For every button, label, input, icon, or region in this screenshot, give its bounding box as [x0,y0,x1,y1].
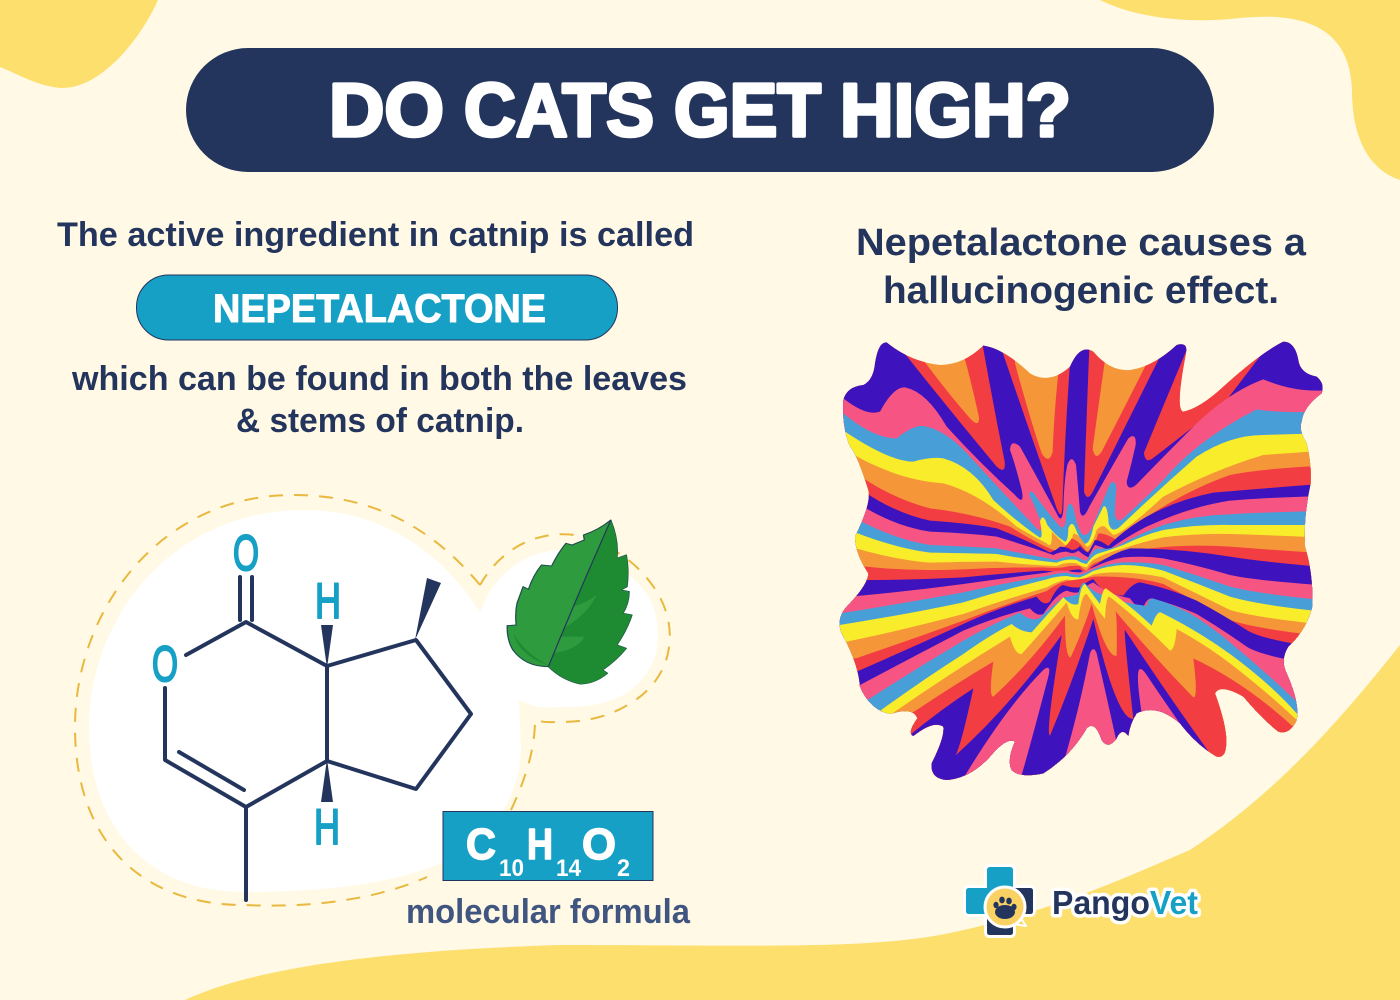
molecular formula box: 2 [617,855,630,882]
molecular formula box: O [582,820,616,869]
text: where it is found: & stems of catnip. [236,402,524,440]
icon: catnip leaf [507,520,632,684]
title banner: CATS [464,68,654,152]
label: molecular formula: molecular formula [406,893,691,931]
title banner: DO [329,68,444,152]
logo wordmark: PangoVet [1052,884,1198,921]
molecular formula box [443,812,653,882]
title banner: HIGH? [840,68,1071,152]
molecule: nepetalactone skeletal formula: O [233,525,259,581]
text: where it is found [71,360,687,440]
nepetalactone pill [136,275,618,340]
background blob: bottom wave [185,645,1400,1000]
molecular formula box: C [466,820,496,869]
molecular formula box: 14 [556,855,582,882]
icon: vet cross with paw badge [966,867,1033,935]
molecule: nepetalactone skeletal formula: O [152,636,178,692]
background blob: top left [0,0,158,88]
text: hallucinogenic effect heading: Nepetalactone causes a [856,222,1307,264]
white blob behind molecule and leaf [89,510,658,892]
molecule: nepetalactone skeletal formula: H [315,573,341,629]
background blob: top right [1100,0,1400,180]
psychedelic swirl illustration [840,342,1323,780]
text: where it is found: which can be found in both the leaves [71,360,687,398]
dashed outline around blob [75,495,670,906]
nepetalactone pill: NEPETALACTONE [213,287,546,331]
molecule: nepetalactone skeletal formula: H [314,799,340,855]
text: hallucinogenic effect heading: hallucinogenic effect. [883,270,1279,312]
logo: PangoVet [966,867,1198,935]
text: active ingredient intro: The active ingredient in catnip is called [57,216,694,254]
title banner: GET [674,68,821,152]
molecule: nepetalactone skeletal formula [152,525,471,900]
title banner [186,48,1214,172]
text: hallucinogenic effect heading [856,222,1307,312]
molecular formula box: H [527,820,553,869]
molecular formula box: 10 [499,855,524,882]
